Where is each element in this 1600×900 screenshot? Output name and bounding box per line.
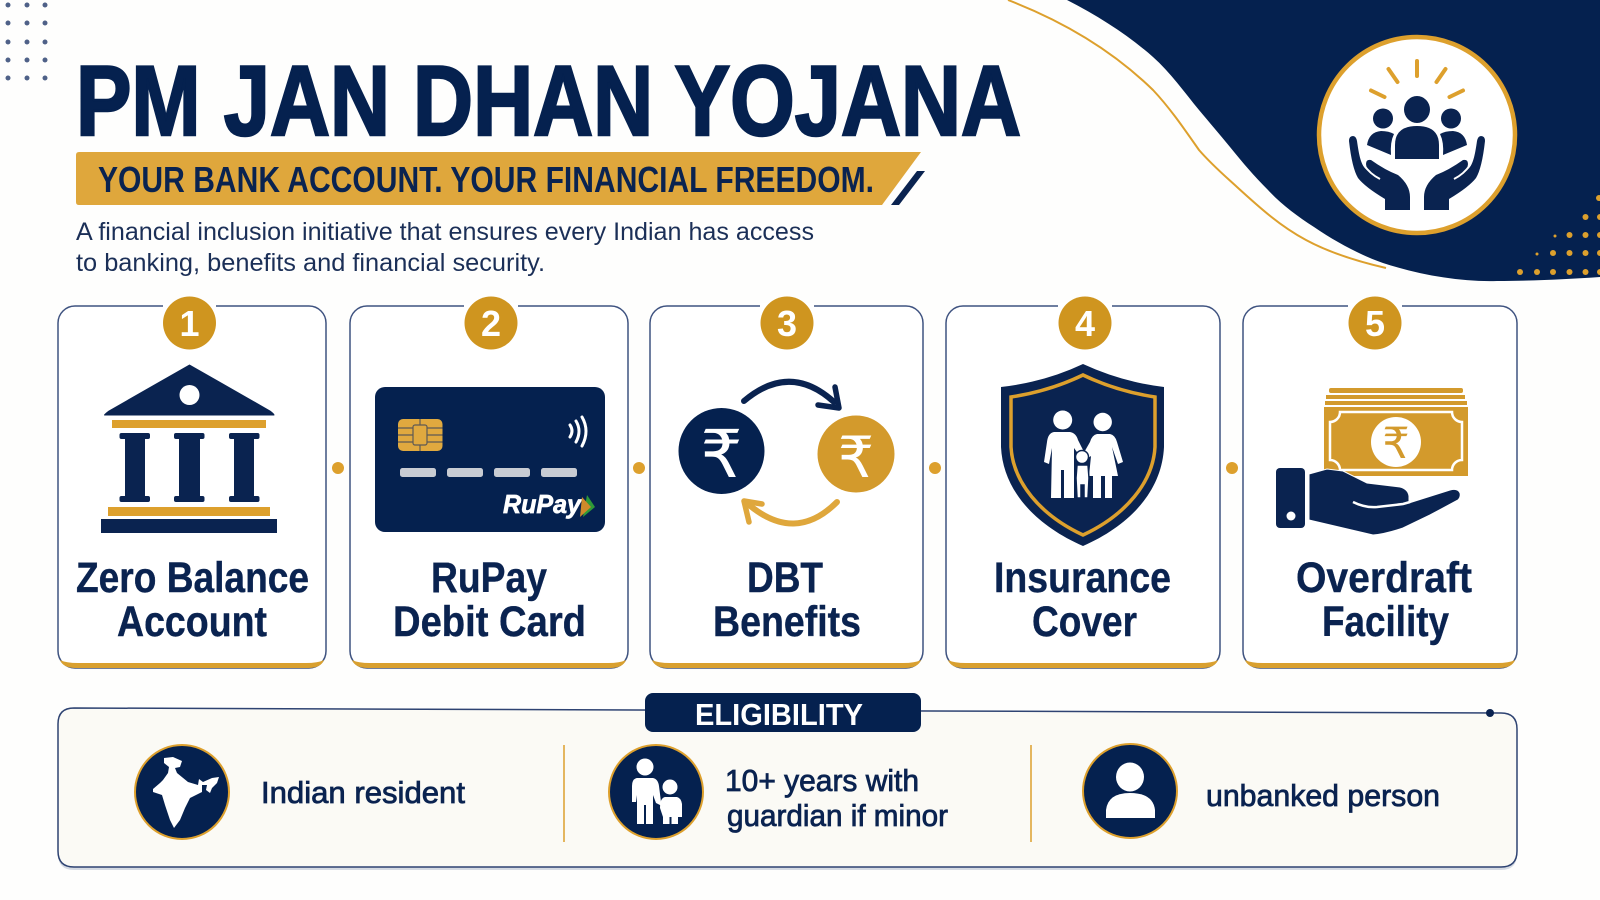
label: DBT <box>747 554 823 602</box>
icon: family shield <box>1001 364 1164 546</box>
panel: card 1 zero balance account <box>58 296 326 668</box>
panel: card 2 rupay debit card <box>350 296 628 668</box>
intro text: A financial inclusion initiative that ensures every Indian has access <box>76 218 814 246</box>
label <box>994 554 1171 646</box>
icon: rupee transfer cycle: ₹ <box>700 417 742 491</box>
tagline banner <box>76 152 925 205</box>
label: Facility <box>1322 598 1449 646</box>
label <box>76 554 309 646</box>
item: unbanked person <box>1083 744 1440 838</box>
intro text: to banking, benefits and financial security. <box>76 249 545 277</box>
icon: debit card <box>375 387 605 532</box>
heading pill: ELIGIBILITY <box>695 697 863 732</box>
icon: hand holding cash <box>1276 388 1468 535</box>
icon: bank building <box>101 365 277 533</box>
tagline banner: YOUR BANK ACCOUNT. YOUR FINANCIAL FREEDOM. <box>98 159 874 200</box>
label: Debit Card <box>393 598 586 646</box>
top-right navy wave <box>1008 0 1600 281</box>
item: indian resident: Indian resident <box>261 775 465 810</box>
badge 1 <box>163 296 216 350</box>
badge 4 <box>1058 296 1112 350</box>
badge 3 <box>760 296 814 350</box>
panel: card 4 insurance cover <box>946 296 1220 668</box>
label: Overdraft <box>1296 554 1472 602</box>
icon: hand holding cash: ₹ <box>1382 420 1410 468</box>
intro text <box>76 218 814 277</box>
item: age <box>609 745 948 839</box>
item: unbanked person: unbanked person <box>1206 778 1440 813</box>
heading pill <box>645 693 921 732</box>
label: Account <box>117 598 267 646</box>
decorative dot grid <box>6 2 48 80</box>
title: PM JAN DHAN YOJANA <box>76 45 1021 156</box>
badge 1: 1 <box>179 303 200 344</box>
panel: card 5 overdraft facility <box>1243 296 1517 668</box>
label: Insurance <box>994 554 1171 602</box>
icon: people in caring hands <box>1319 37 1515 233</box>
label: Cover <box>1032 598 1137 646</box>
item: indian resident <box>135 745 465 839</box>
icon: debit card: RuPay <box>503 489 582 519</box>
label: RuPay <box>431 554 547 602</box>
item: age: 10+ years with <box>725 763 919 798</box>
badge 3: 3 <box>777 303 797 344</box>
connector dots <box>332 462 1238 474</box>
badge 4: 4 <box>1075 303 1095 344</box>
label: Zero Balance <box>76 554 309 602</box>
panel: card 3 dbt benefits <box>650 296 923 668</box>
label <box>713 554 861 646</box>
badge 5: 5 <box>1365 303 1385 344</box>
label <box>393 554 586 646</box>
label <box>1296 554 1472 646</box>
badge 2: 2 <box>481 303 501 344</box>
panel: eligibility <box>58 693 1517 870</box>
badge 5 <box>1348 296 1402 350</box>
icon: rupee transfer cycle: ₹ <box>838 426 874 490</box>
icon: rupee transfer cycle <box>678 382 894 524</box>
badge 2 <box>464 296 518 350</box>
item: age: guardian if minor <box>727 798 948 833</box>
label: Benefits <box>713 598 861 646</box>
